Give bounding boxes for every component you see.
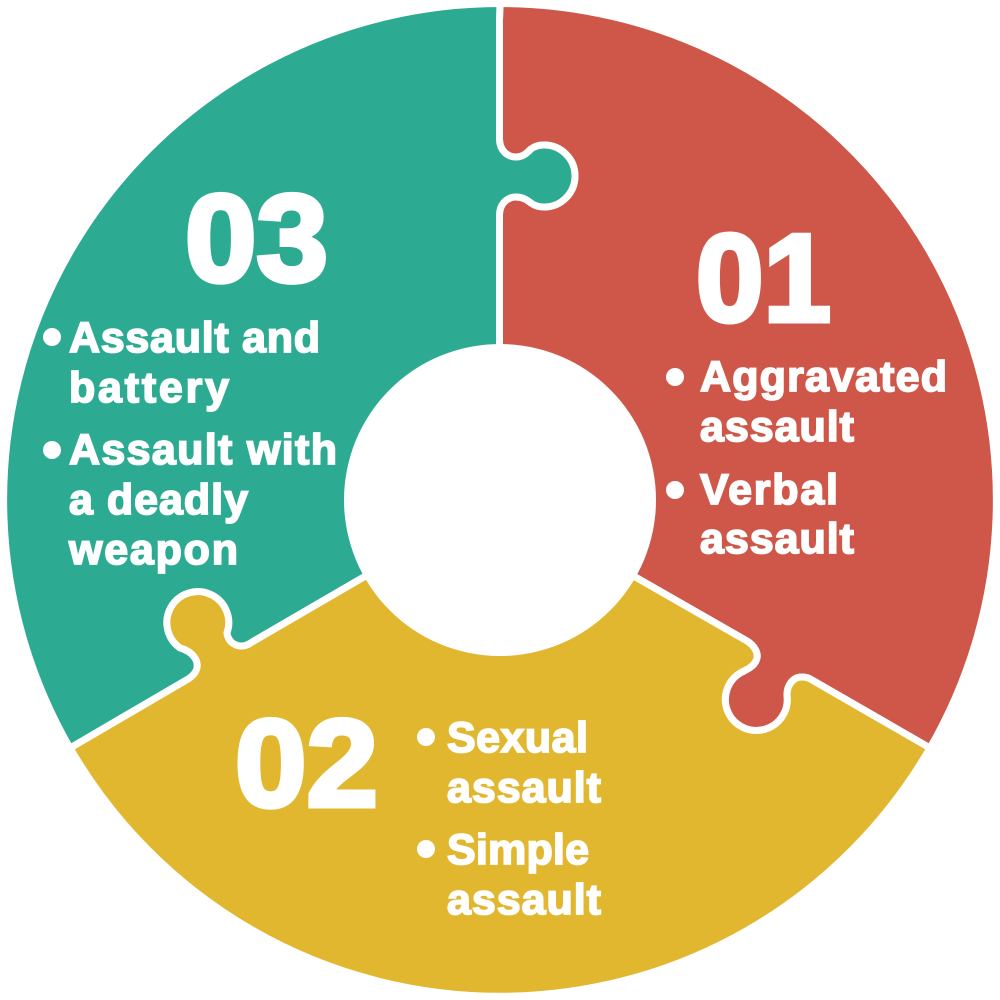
number 02: 02 xyxy=(235,695,378,833)
panel: 02 yellow puzzle segment xyxy=(70,500,930,996)
item: Assault and battery: battery xyxy=(69,364,229,412)
item: Verbal assault xyxy=(700,466,854,563)
list: 01 items xyxy=(666,353,947,563)
item: Aggravated assault: Aggravated xyxy=(700,353,947,401)
item: Verbal assault: Verbal xyxy=(700,466,838,514)
number 01: 01 xyxy=(696,210,831,348)
item: Aggravated assault xyxy=(700,353,947,451)
panel: 03 teal puzzle segment xyxy=(4,4,575,748)
item: Aggravated assault: assault xyxy=(700,403,854,451)
item: Simple assault: Simple xyxy=(447,826,589,874)
item: Sexual assault xyxy=(447,714,601,812)
number 03: 03 xyxy=(185,170,328,308)
bullet xyxy=(417,728,435,746)
bullet xyxy=(43,328,61,346)
list: 02 items xyxy=(417,714,601,924)
item: Sexual assault: Sexual xyxy=(447,714,588,762)
bullet xyxy=(43,441,61,459)
item: Assault with a deadly weapon: Assault with xyxy=(69,426,337,474)
item: Simple assault xyxy=(447,826,601,924)
item: Simple assault: assault xyxy=(447,876,601,924)
list: 03 items xyxy=(43,314,337,574)
item: Verbal assault: assault xyxy=(700,515,854,563)
bullet xyxy=(666,481,684,499)
item: Assault and battery: Assault and xyxy=(69,314,320,362)
bullet xyxy=(417,840,435,858)
item: Assault and battery xyxy=(69,314,320,412)
item: Assault with a deadly weapon xyxy=(68,426,337,574)
item: Assault with a deadly weapon: a deadly xyxy=(69,476,248,524)
panel: 01 red puzzle segment xyxy=(500,4,996,748)
center white circle xyxy=(344,344,656,656)
item: Assault with a deadly weapon: weapon xyxy=(68,526,238,574)
item: Sexual assault: assault xyxy=(447,764,601,812)
bullet xyxy=(666,368,684,386)
